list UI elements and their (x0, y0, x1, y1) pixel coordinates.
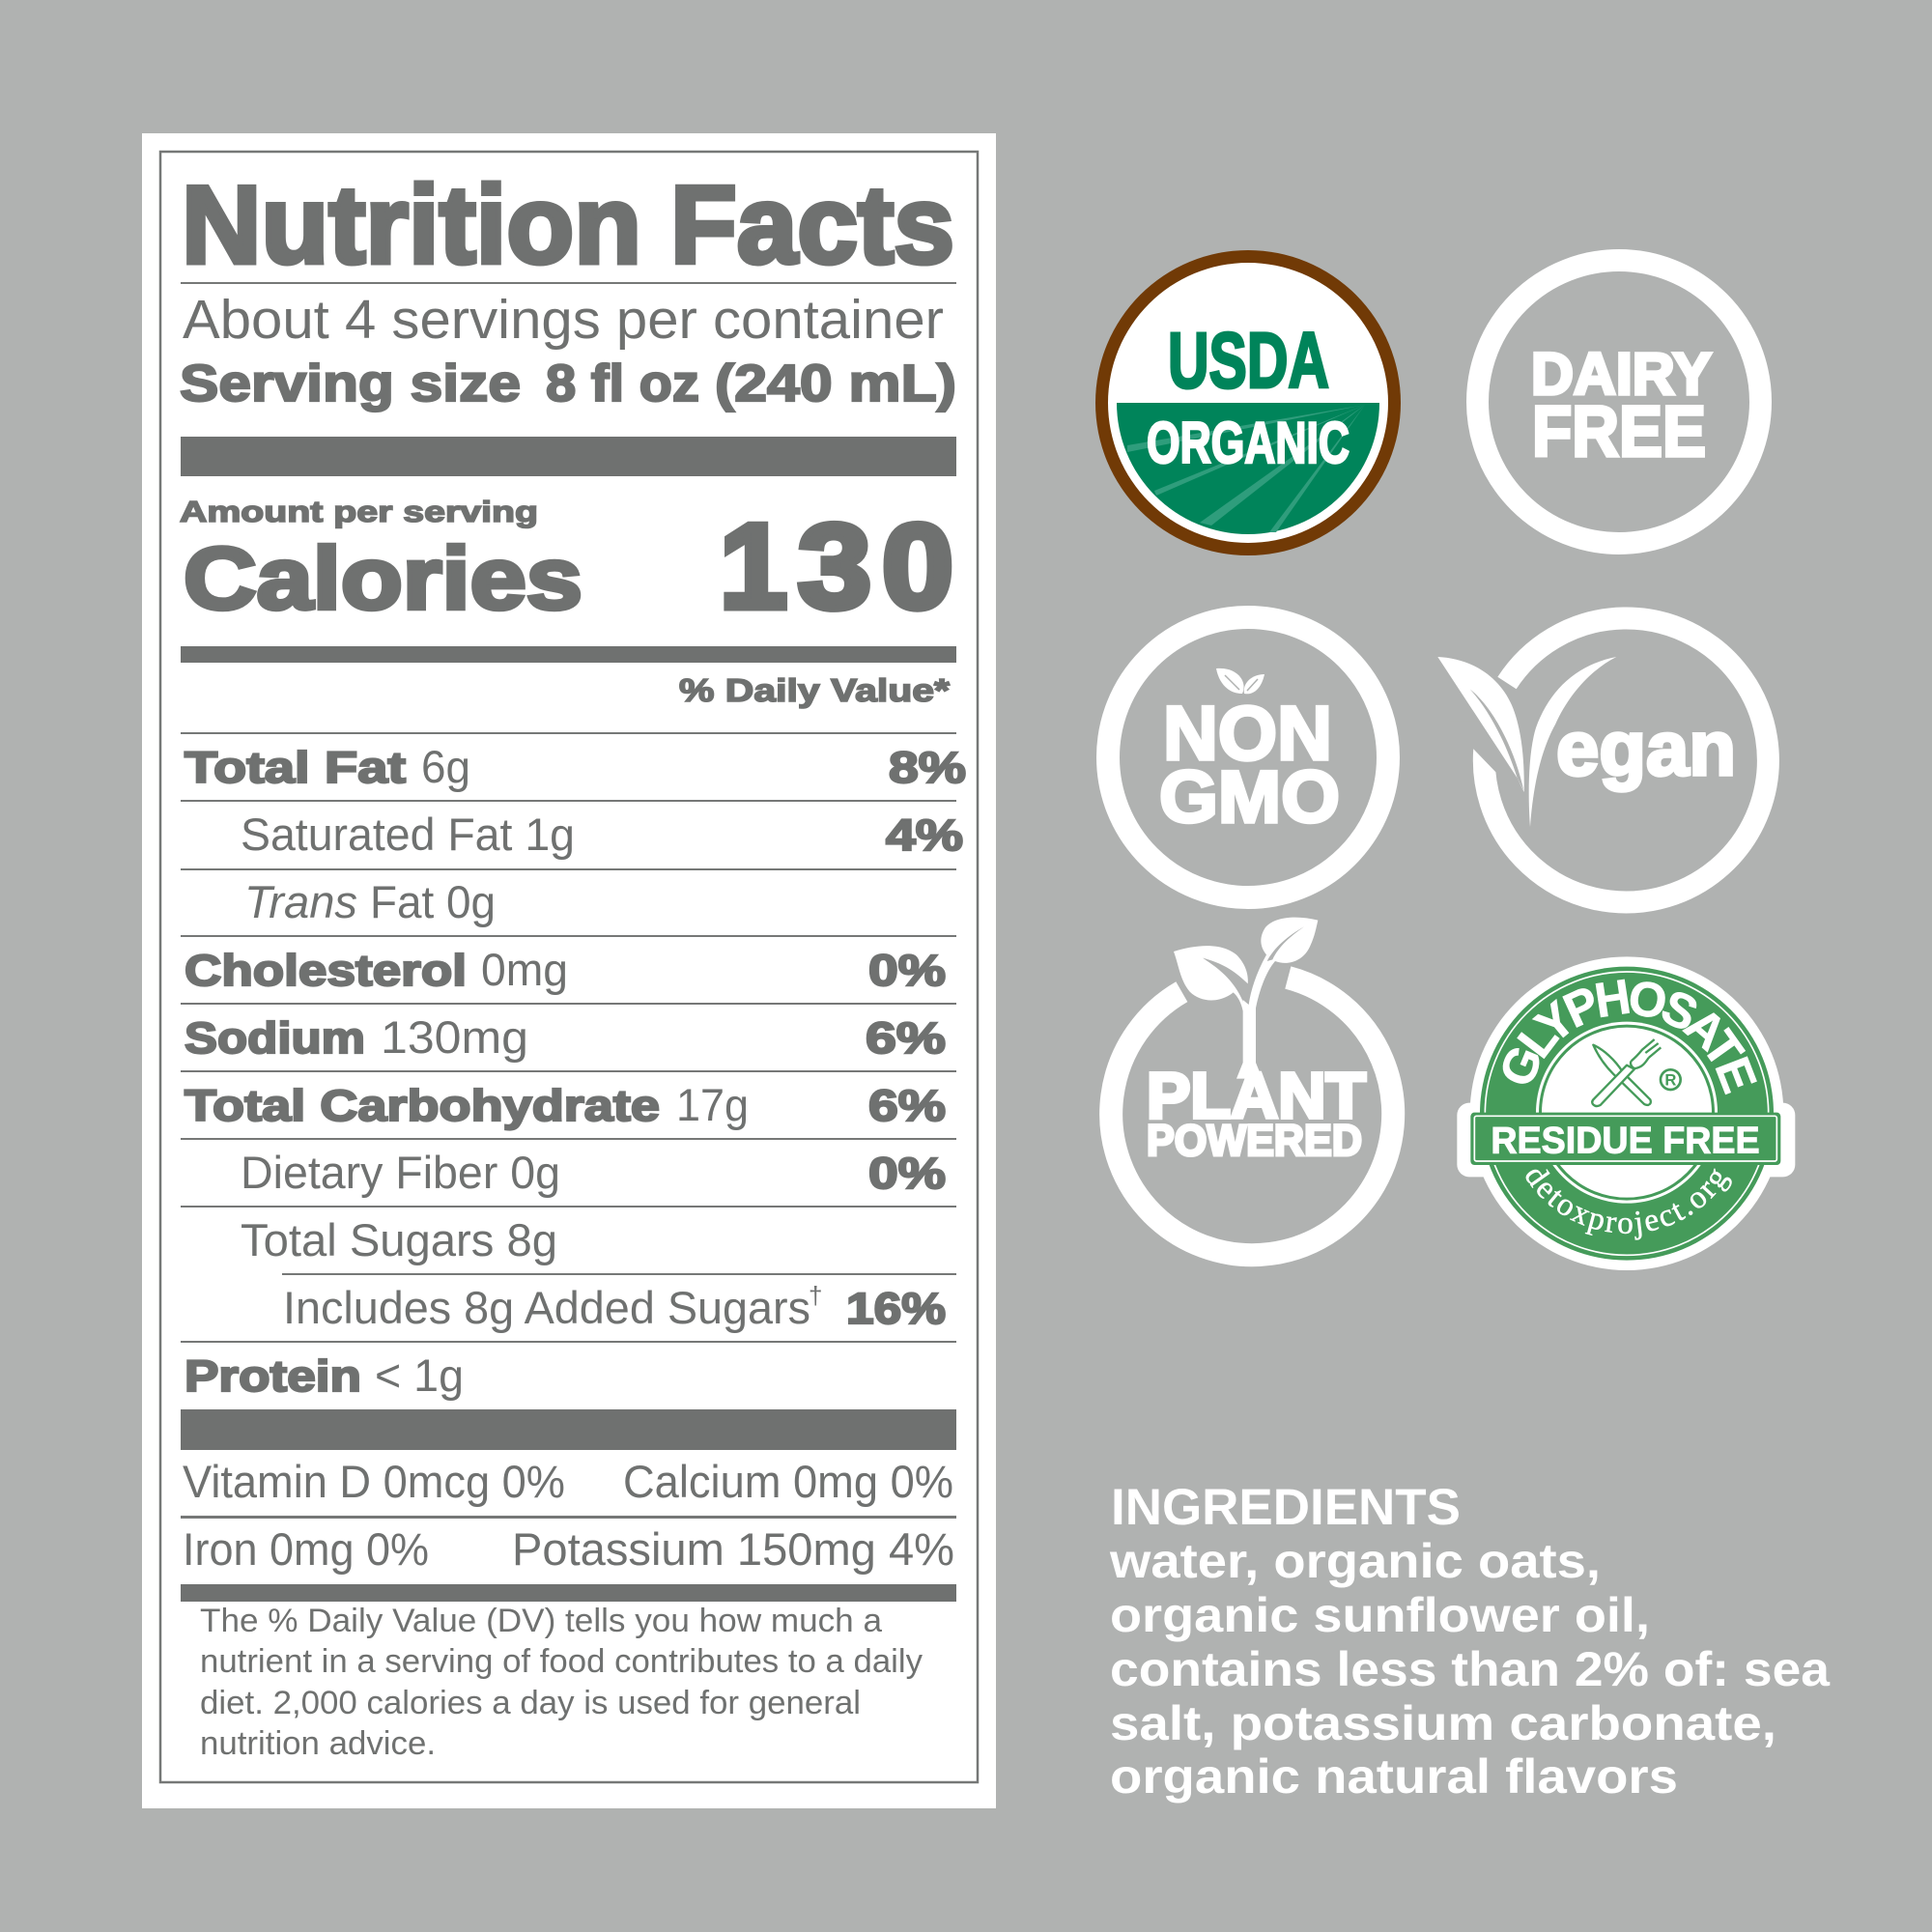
icon: non GMO badge (1108, 617, 1388, 897)
icon: USDA organic seal: USDA (1168, 317, 1329, 405)
text block: ingredients: salt, potassium carbonate, (1110, 1696, 1776, 1750)
row: cholesterol: 0% (868, 946, 946, 995)
icon: glyphosate residue free seal: R (1664, 1071, 1676, 1090)
panel: nutrition facts label (142, 133, 996, 1808)
text: amount per serving: Amount per serving (180, 495, 538, 528)
text: servings per container: About 4 servings per container (183, 289, 944, 351)
text block: ingredients: water, organic oats, (1109, 1534, 1601, 1588)
text: serving size: (240 mL) (715, 355, 956, 412)
row: sodium: Sodium (185, 1013, 365, 1063)
icon: knife and fork (1592, 1039, 1661, 1106)
row: total fat: 8% (889, 743, 966, 792)
icon: glyphosate residue free seal (1457, 956, 1795, 1270)
icon: vegan badge: egan (1556, 705, 1736, 791)
text: serving size: Serving size (180, 355, 521, 412)
icon: glyphosate residue free seal: detoxproject.org (1526, 1169, 1732, 1240)
row: sodium (185, 1011, 946, 1063)
row: trans fat: Trans (244, 876, 357, 927)
row: vitamin D and calcium: Calcium 0mg 0% (623, 1456, 953, 1507)
number: calories value: 1 (720, 500, 787, 634)
heading: Nutrition Facts (182, 164, 954, 287)
row: added sugars: Includes 8g Added Sugars (283, 1282, 810, 1333)
text block: ingredients: organic natural flavors (1110, 1749, 1678, 1804)
row: total fat: Total Fat (185, 743, 406, 792)
row: iron and potassium: Iron 0mg 0% (183, 1523, 429, 1575)
text: serving size (180, 355, 956, 412)
row: protein (185, 1350, 464, 1401)
row: dietary fiber (241, 1147, 946, 1198)
heading: Nutrition Facts: Nutrition (182, 164, 641, 287)
text: daily value footnote: The % Daily Value (DV) tells you how much a (200, 1603, 882, 1639)
text block: ingredients: organic sunflower oil, (1110, 1588, 1650, 1642)
icon: glyphosate residue free seal: GLYPHOSATE (1503, 980, 1757, 1095)
number: calories value: 3 (798, 500, 871, 634)
icon: plant powered badge: PLANT (1147, 1060, 1366, 1132)
text: daily value footnote: nutrient in a serving of food contributes to a daily (200, 1643, 923, 1680)
text: percent daily value header: % Daily Value* (679, 672, 950, 708)
icon: dairy free badge: DAIRY (1531, 341, 1712, 407)
row: trans fat: Fat 0g (370, 876, 496, 927)
row: total fat: 6g (421, 741, 470, 792)
icon: plant powered badge: POWERED (1147, 1116, 1362, 1165)
row: total sugars: Total Sugars 8g (241, 1214, 557, 1265)
number: calories value (720, 500, 953, 634)
number: calories value: 0 (882, 500, 953, 634)
text: daily value footnote: diet. 2,000 calories a day is used for general (200, 1685, 861, 1721)
icon: vegan badge (1437, 618, 1768, 902)
row: saturated fat (241, 809, 963, 860)
icon: non GMO badge: GMO (1159, 756, 1340, 838)
row: total carbohydrate: 6% (868, 1081, 946, 1130)
row: sodium: 130mg (381, 1011, 528, 1063)
row: total carbohydrate (185, 1079, 946, 1130)
text block: ingredients: contains less than 2% of: sea (1110, 1642, 1831, 1696)
row: vitamin D and calcium (183, 1456, 953, 1507)
text: calories label: Calories (184, 530, 582, 628)
row: protein: Protein (185, 1351, 361, 1401)
text: daily value footnote (200, 1603, 923, 1762)
row: cholesterol: 0mg (481, 944, 568, 995)
row: trans fat (244, 876, 496, 927)
row: cholesterol: Cholesterol (185, 946, 467, 995)
row: dietary fiber: Dietary Fiber 0g (241, 1147, 560, 1198)
icon: glyphosate residue free seal: RESIDUE FREE (1491, 1120, 1760, 1161)
row: protein: < 1g (375, 1350, 464, 1401)
heading: Nutrition Facts: Facts (670, 164, 954, 287)
icon: dairy free badge: FREE (1532, 391, 1706, 471)
text: daily value footnote: nutrition advice. (200, 1725, 436, 1762)
row: added sugars: † (809, 1281, 822, 1310)
row: dietary fiber: 0% (868, 1149, 946, 1198)
row: total carbohydrate: Total Carbohydrate (185, 1081, 660, 1130)
row: vitamin D and calcium: Vitamin D 0mcg 0% (183, 1456, 565, 1507)
icon: dairy free badge (1478, 261, 1760, 543)
row: saturated fat: 4% (886, 810, 963, 860)
text block: ingredients (1109, 1479, 1831, 1804)
icon: USDA organic seal (1095, 250, 1401, 555)
row: iron and potassium: Potassium 150mg 4% (512, 1523, 954, 1575)
row: cholesterol (185, 944, 946, 995)
row: iron and potassium (183, 1523, 954, 1575)
icon: non GMO badge: NON (1163, 690, 1332, 776)
icon: USDA organic seal: ORGANIC (1147, 411, 1350, 475)
row: total fat (185, 741, 966, 792)
row: sodium: 6% (866, 1013, 946, 1063)
row: total carbohydrate: 17g (676, 1079, 749, 1130)
text: serving size: 8 fl oz (546, 355, 699, 412)
row: added sugars: 16% (846, 1284, 946, 1333)
row: saturated fat: Saturated Fat 1g (241, 809, 575, 860)
text block: ingredients: INGREDIENTS (1111, 1479, 1461, 1536)
icon: plant powered badge (1111, 918, 1393, 1255)
